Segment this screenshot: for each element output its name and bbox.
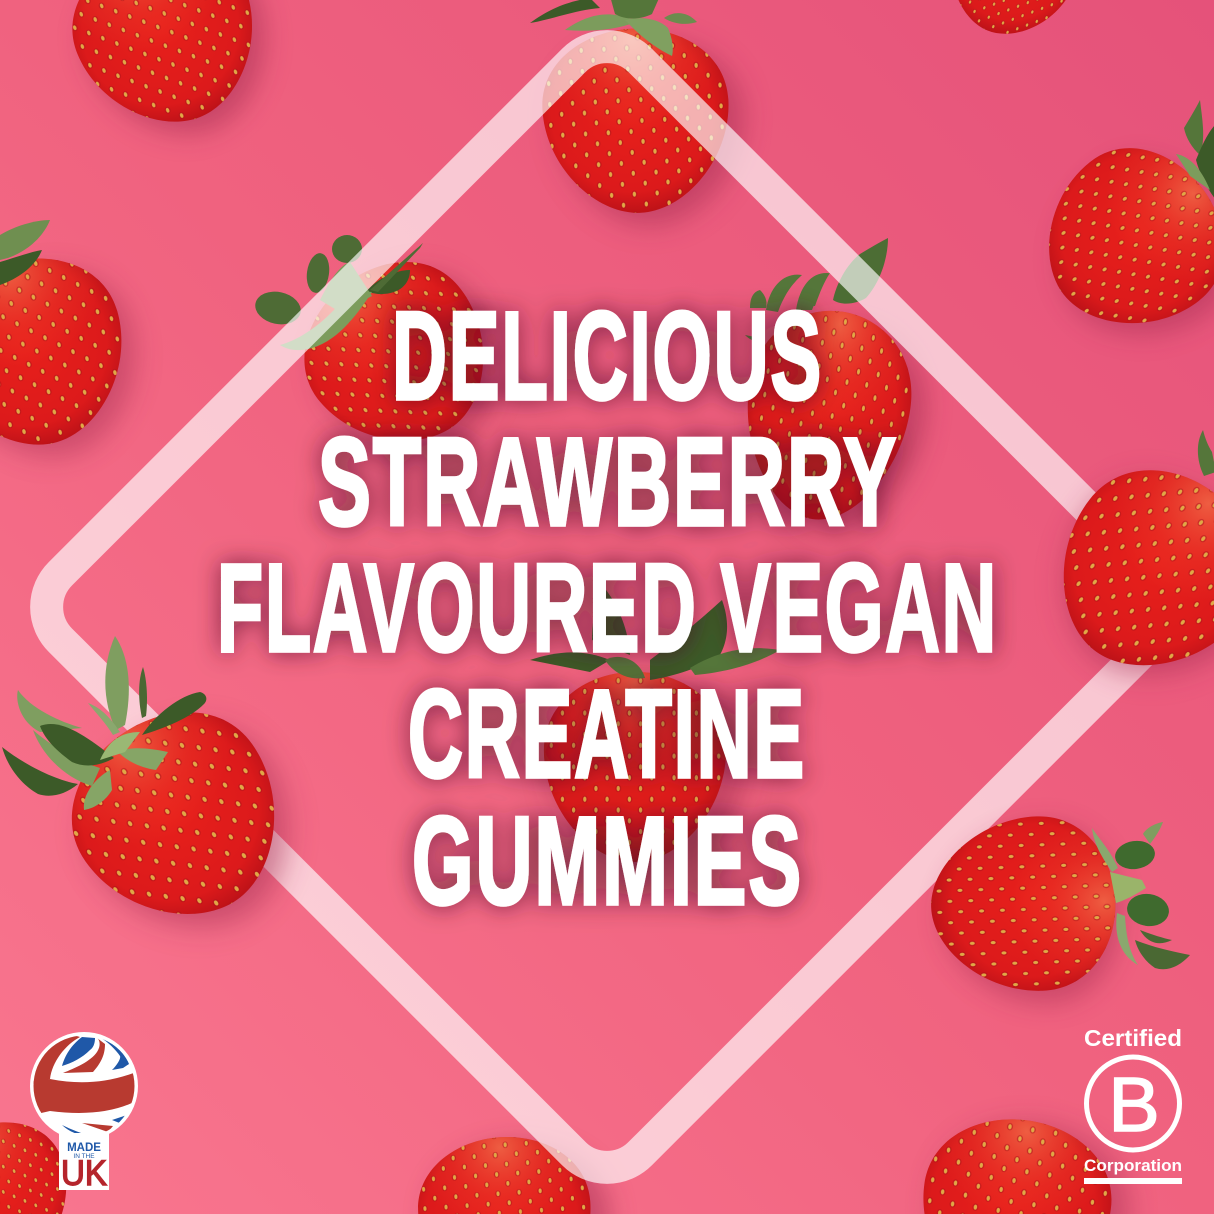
headline: STRAWBERRY [318, 413, 898, 552]
badge: Certified B Corporation: B [1108, 1062, 1160, 1148]
headline: DELICIOUS [392, 287, 823, 426]
strawberry: top left [72, 0, 275, 143]
strawberry: lower right [928, 814, 1190, 1007]
strawberry: behind CREATINE [530, 585, 780, 874]
badge: made in the UK [28, 1032, 138, 1193]
headline: GUMMIES [412, 792, 803, 931]
badge: made in the UK: IN THE [73, 1153, 95, 1160]
badge: Certified B Corporation [1084, 1025, 1182, 1184]
strawberries above the diamond [0, 430, 1214, 1214]
badge: made in the UK: MADE [67, 1142, 101, 1154]
strawberry: middle right [1056, 430, 1214, 688]
strawberry: bottom centre [413, 1131, 610, 1214]
badge: Certified B Corporation: Certified [1084, 1025, 1182, 1051]
strawberry: behind DELICIOUS right [732, 238, 938, 543]
headline [217, 287, 998, 931]
strawberry: top right [958, 0, 1066, 34]
strawberry: upper right [1049, 100, 1214, 342]
strawberry: top centre [530, 0, 744, 226]
strawberry: behind DELICIOUS left [255, 235, 502, 456]
strawberry: bottom left large [2, 636, 302, 937]
strawberry: bottom right [923, 1114, 1138, 1214]
badge: made in the UK: UK [61, 1154, 107, 1193]
headline: CREATINE [408, 665, 806, 804]
strawberry: middle left [0, 220, 145, 466]
badge: Certified B Corporation: Corporation [1084, 1156, 1182, 1175]
strawberry: bottom left corner [0, 1122, 66, 1214]
